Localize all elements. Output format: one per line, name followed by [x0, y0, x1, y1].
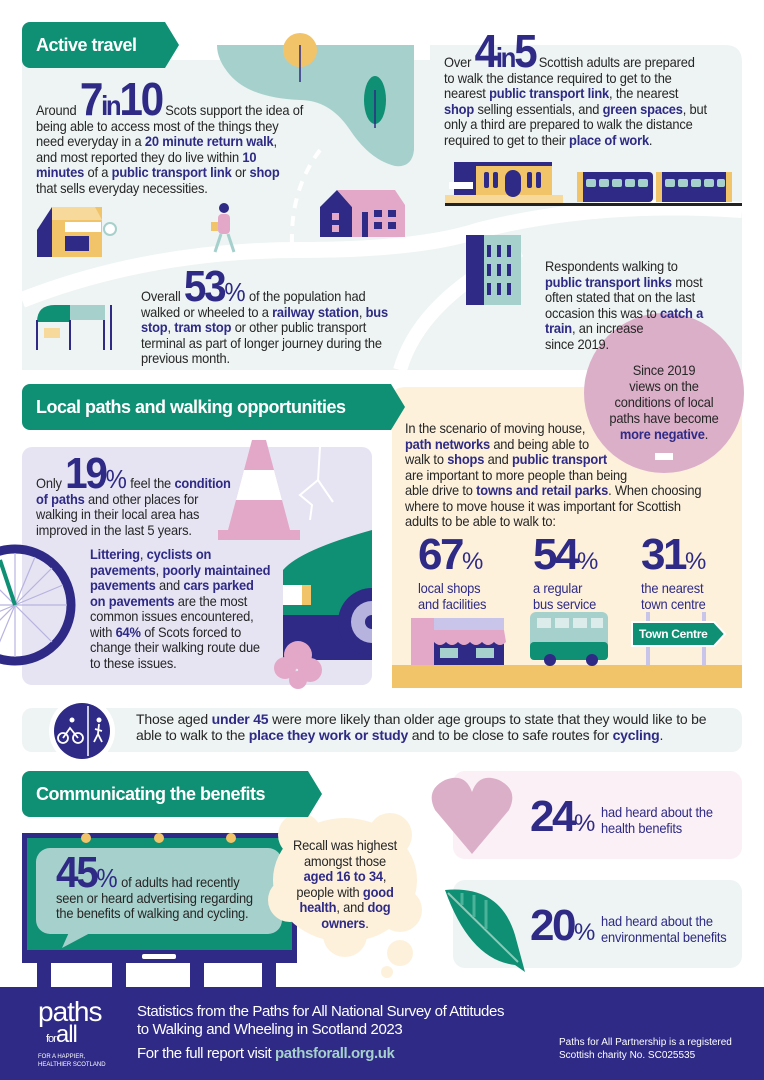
stat: 67%: local shops — [418, 580, 480, 596]
text block: 45%: seen or heard advertising regarding — [56, 890, 253, 906]
text block: littering: pavements and cars parked — [90, 577, 254, 593]
text block: 53%: stop, tram stop or other public transport — [141, 319, 366, 335]
text block: under 45 — [136, 711, 706, 743]
text block: recall — [293, 837, 398, 930]
stat: 31%: the nearest — [641, 580, 703, 596]
stat: 54%: bus service — [533, 596, 596, 612]
text block: recall: people with good — [296, 884, 394, 900]
icon: walker — [211, 203, 234, 252]
text block: 4 in 5: shop selling essentials, and green spaces, but — [444, 100, 707, 116]
icon: train station and train — [445, 162, 742, 206]
text block: littering: on pavements are the most — [90, 592, 247, 608]
stat: 67%: 67% — [418, 530, 483, 579]
text block: 19% — [36, 449, 231, 538]
text block: moving house — [405, 420, 701, 529]
text block: respondents — [545, 258, 704, 352]
icon: bike wheel — [0, 549, 71, 661]
text block: 7 in 10: that sells everyday necessities. — [36, 180, 208, 196]
text block: 53%: walked or wheeled to a railway station, bus — [141, 304, 388, 320]
panel: teal environment — [453, 880, 742, 968]
text block: respondents: public transport links most — [545, 274, 702, 290]
text block: moving house: where to move house it was important for Scottish — [405, 498, 681, 514]
text block: under 45: able to walk to the place they work or study and to be close to safe routes for cycling. — [136, 726, 663, 742]
callout text: views negative: views on the — [629, 378, 699, 394]
logo: paths for all: FOR A HAPPIER, — [38, 1054, 85, 1060]
stat: 54%: 54% — [533, 530, 598, 579]
icon: shop — [37, 207, 116, 257]
stat: 54%: a regular — [533, 580, 582, 596]
text block: 7 in 10: Around 7in10 Scots support the idea of — [36, 73, 303, 125]
text block: littering: common issues encountered, — [90, 608, 253, 624]
text block: moving house: able drive to towns and retail parks. When choosing — [405, 482, 701, 498]
stat: 20% environmental: environmental benefits — [601, 928, 727, 944]
panel: pink health — [453, 771, 742, 859]
text block: 4 in 5: Over 4in5 Scottish adults are prepared — [444, 25, 695, 77]
pond — [217, 45, 414, 166]
icon: bus stop — [37, 305, 111, 350]
text block: 4 in 5: required to get to their place of work. — [444, 132, 652, 148]
callout: pink circle — [584, 313, 744, 473]
text block: recall: aged 16 to 34, — [304, 868, 386, 884]
icon: billboard — [22, 833, 297, 988]
text block: moving house: In the scenario of moving house, — [405, 420, 585, 436]
text block: 53%: Overall 53% of the population had — [141, 262, 365, 311]
icon: bike and walk circle — [49, 698, 115, 764]
text block: 4 in 5 — [444, 25, 707, 148]
heading: Active travel — [22, 22, 162, 68]
panel: cream moving house — [392, 387, 742, 688]
heading: Local paths — [22, 384, 388, 430]
text block: recall: Recall was highest — [293, 837, 397, 853]
text block: 45%: 45% of adults had recently — [56, 848, 239, 897]
text block: respondents: Respondents walking to — [545, 258, 678, 274]
icon: shopfront — [411, 618, 506, 665]
stat: 24% health — [530, 792, 713, 841]
text block: recall: amongst those — [304, 852, 386, 868]
callout text: views negative — [609, 362, 719, 442]
icon: car — [283, 530, 372, 660]
footer band — [0, 987, 764, 1080]
panel: cycle banner — [22, 708, 742, 752]
text block: 7 in 10: being able to access most of the things they — [36, 118, 279, 134]
callout text: views negative: paths have become — [609, 410, 719, 426]
footer text — [137, 1003, 504, 1062]
text block: 19%: of paths and other places for — [36, 490, 198, 506]
text block: 4 in 5: nearest public transport link, the nearest — [444, 85, 678, 101]
stat: 20% environmental: had heard about the — [601, 913, 713, 929]
text block: 7 in 10: minutes of a public transport link or shop — [36, 164, 280, 180]
icon: green tree — [364, 76, 386, 128]
sign label: Town Centre — [639, 627, 707, 641]
logo: paths for all — [38, 996, 106, 1068]
text block: 7 in 10: need everyday in a 20 minute return walk, — [36, 133, 277, 149]
text block: 53% — [141, 262, 388, 366]
heading: Communicating — [22, 771, 305, 817]
stat: 31%: 31% — [641, 530, 706, 579]
stat: 31% — [641, 530, 706, 612]
icon: bus — [530, 612, 608, 666]
text block: under 45: Those aged under 45 were more likely than older age groups to state that they would like to be — [136, 711, 706, 727]
icon: heart — [432, 778, 512, 854]
text block: 19%: improved in the last 5 years. — [36, 522, 192, 538]
text block: respondents: occasion this was to catch a — [545, 304, 703, 320]
heading: Communicating: Communicating the benefits — [36, 784, 265, 804]
footer text: Statistics from the Paths for All National Survey of Attitudes — [137, 1003, 504, 1020]
stat: 67%: and facilities — [418, 596, 486, 612]
text block: 45% — [56, 848, 253, 921]
logo: paths for all: HEALTHIER SCOTLAND — [38, 1062, 106, 1068]
text block: respondents: since 2019. — [545, 336, 609, 352]
panel: lavender paths — [22, 447, 372, 685]
text block: moving house: walk to shops and public transport — [405, 451, 607, 467]
icon: house — [320, 190, 405, 237]
text block: recall: owners. — [321, 914, 369, 930]
stat: 24% health: 24% — [530, 792, 595, 841]
heading: Active travel: Active travel — [36, 34, 137, 54]
text block: 7 in 10 — [36, 73, 304, 196]
text block: 4 in 5: to walk the distance required to get to the — [444, 70, 672, 86]
icon: pink splat — [274, 641, 322, 689]
stat: 67% — [418, 530, 486, 612]
text block: littering: pavements, poorly maintained — [90, 562, 270, 578]
text block: moving house: adults to be able to walk to: — [405, 513, 556, 529]
footer text: to Walking and Wheeling in Scotland 2023 — [137, 1021, 402, 1038]
roads — [22, 208, 742, 300]
footer charity note — [559, 1037, 732, 1061]
text block: 19%: Only 19% feel the condition — [36, 449, 231, 498]
icon: office building — [466, 235, 521, 305]
stat: 54% — [533, 530, 598, 612]
text block: littering: change their walking route due — [90, 639, 260, 655]
text block: 45%: the benefits of walking and cycling. — [56, 905, 248, 921]
text block: 7 in 10: and most reported they do live within 10 — [36, 148, 256, 164]
text block: littering — [90, 546, 270, 670]
text block: 53%: terminal as part of longer journey during the — [141, 334, 382, 350]
text block: littering: Littering, cyclists on — [90, 546, 211, 562]
text block: respondents: train, an increase — [545, 320, 643, 336]
text block: recall: health, and dog — [299, 899, 390, 915]
callout text: views negative: conditions of local — [615, 394, 713, 410]
logo: paths for all: forall — [46, 1021, 77, 1048]
text block: 19%: walking in their local area has — [36, 506, 199, 522]
panel: active travel background — [22, 45, 742, 370]
footer charity note: Paths for All Partnership is a registered — [559, 1037, 732, 1048]
footer charity note: Scottish charity No. SC025535 — [559, 1050, 695, 1061]
callout text: views negative: more negative. — [620, 426, 708, 442]
heading: Local paths: Local paths and walking opportunities — [36, 396, 346, 416]
stat: 24% health: had heard about the — [601, 804, 713, 820]
text block: respondents: often stated that on the last — [545, 289, 695, 305]
text block: 4 in 5: only a third are prepared to walk the distance — [444, 116, 693, 132]
logo: paths for all: paths — [38, 996, 102, 1027]
stat: 31%: town centre — [641, 596, 706, 612]
icon: cracks — [300, 447, 333, 520]
footer text: For the full report visit pathsforall.org.uk — [137, 1045, 394, 1062]
text block: 53%: previous month. — [141, 350, 230, 366]
text block: moving house: are important to more people than being — [405, 466, 627, 482]
icon: town centre sign — [632, 612, 725, 665]
text block: littering: to these issues. — [90, 654, 177, 670]
icon: yellow tree — [283, 33, 317, 82]
stat: 20% environmental — [530, 901, 727, 950]
icon: leaf — [445, 890, 525, 972]
callout text: views negative: Since 2019 — [633, 362, 695, 378]
callout: thought bubble — [268, 813, 422, 978]
icon: cone — [218, 440, 300, 540]
text block: littering: with 64% of Scots forced to — [90, 624, 241, 640]
stat: 24% health: health benefits — [601, 820, 682, 836]
text block: moving house: path networks and being able to — [405, 436, 589, 452]
stat: 20% environmental: 20% — [530, 901, 595, 950]
